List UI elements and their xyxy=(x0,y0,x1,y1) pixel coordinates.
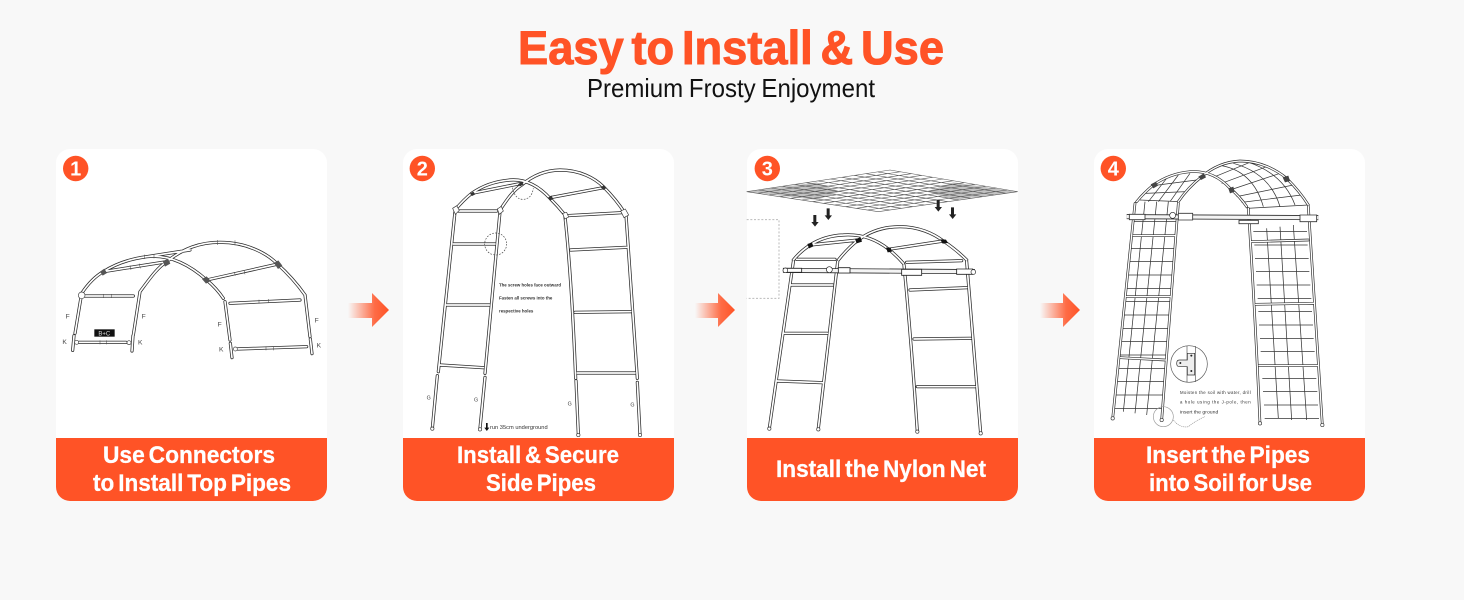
step 4 illustration: arch with net inserted into soil: Moisten the soil with water, drill xyxy=(1180,390,1251,395)
arrow 1 xyxy=(348,293,389,327)
arrow 3 xyxy=(1040,293,1080,327)
step 3 caption band: Install the Nylon Net xyxy=(776,456,986,483)
step 2 caption band xyxy=(403,438,674,501)
step 4 caption band: into Soil for Use xyxy=(1149,470,1312,497)
step 2 illustration: side pipes: G xyxy=(568,401,572,407)
detail circle: J-pole bracket xyxy=(1171,346,1207,382)
step 2 illustration: side pipes xyxy=(427,170,642,437)
subtitle: Premium Frosty Enjoyment xyxy=(587,73,876,103)
step 4 number badge xyxy=(1101,156,1126,181)
step 3 number badge xyxy=(755,156,780,181)
step 2 illustration: side pipes: run 35cm underground xyxy=(490,425,548,431)
step 4 caption band: Insert the Pipes xyxy=(1146,442,1310,469)
title: Easy to Install & Use xyxy=(518,21,944,74)
step 3 caption band xyxy=(747,438,1018,501)
arrow 2 xyxy=(695,293,735,327)
step 1 caption band xyxy=(56,438,327,501)
step 1 illustration: top pipes: F xyxy=(218,322,222,329)
panel: step 1 xyxy=(56,149,327,501)
panel: step 2 xyxy=(403,149,674,501)
horizontal pole with clamps xyxy=(783,267,976,275)
step 2 illustration: side pipes: G xyxy=(630,403,634,409)
panel: step 4 xyxy=(1094,149,1365,501)
step 1 number badge xyxy=(63,156,88,181)
step 2 caption band: Install & Secure xyxy=(457,442,619,469)
nylon net xyxy=(747,170,1018,212)
step 2 number badge xyxy=(410,156,435,181)
step 1 illustration: top pipes xyxy=(62,240,322,358)
step 1 illustration: top pipes: K xyxy=(62,339,67,346)
step 2 illustration: side pipes: G xyxy=(427,396,431,402)
dashed detail circles xyxy=(485,188,533,255)
step 1 caption band: Use Connectors xyxy=(103,442,275,469)
step 2 illustration: side pipes: G xyxy=(474,398,478,404)
step 2 caption band: Side Pipes xyxy=(486,470,596,497)
step 1 illustration: top pipes: K xyxy=(138,339,143,346)
step 1 caption band: to Install Top Pipes xyxy=(93,470,291,497)
step 4 caption band xyxy=(1094,438,1365,501)
step 1 illustration: top pipes: B+C xyxy=(98,331,111,337)
step 1 illustration: top pipes: K xyxy=(219,346,224,353)
step 2 illustration: side pipes: respective holes xyxy=(499,309,534,314)
step 2 illustration: side pipes: Fasten all screws into the xyxy=(499,296,553,301)
step 1 illustration: top pipes: F xyxy=(66,313,70,320)
pipe tips xyxy=(431,427,642,437)
step 1 number badge: 1 xyxy=(70,158,81,180)
horizontal pole with clamps xyxy=(1127,212,1318,224)
step 1 illustration: top pipes: F xyxy=(142,313,146,320)
step 2 number badge: 2 xyxy=(417,158,428,180)
step 3 number badge: 3 xyxy=(762,158,773,180)
pipe tips xyxy=(1111,417,1324,427)
step 1 illustration: top pipes: F xyxy=(315,317,319,324)
step 3 illustration: nylon net xyxy=(747,170,1018,435)
step 1 illustration: top pipes: K xyxy=(317,342,322,349)
net grid xyxy=(1114,162,1319,420)
step 2 illustration: side pipes: The screw holes face outward xyxy=(499,283,561,288)
step 4 illustration: arch with net inserted into soil xyxy=(1111,161,1324,427)
pipe tips xyxy=(768,427,982,435)
step 4 illustration: arch with net inserted into soil: insert the ground xyxy=(1180,409,1219,414)
step 4 illustration: arch with net inserted into soil: a hole using the J-pole, then xyxy=(1180,400,1251,405)
panel: step 3 xyxy=(747,149,1018,501)
step 4 number badge: 4 xyxy=(1108,158,1120,180)
